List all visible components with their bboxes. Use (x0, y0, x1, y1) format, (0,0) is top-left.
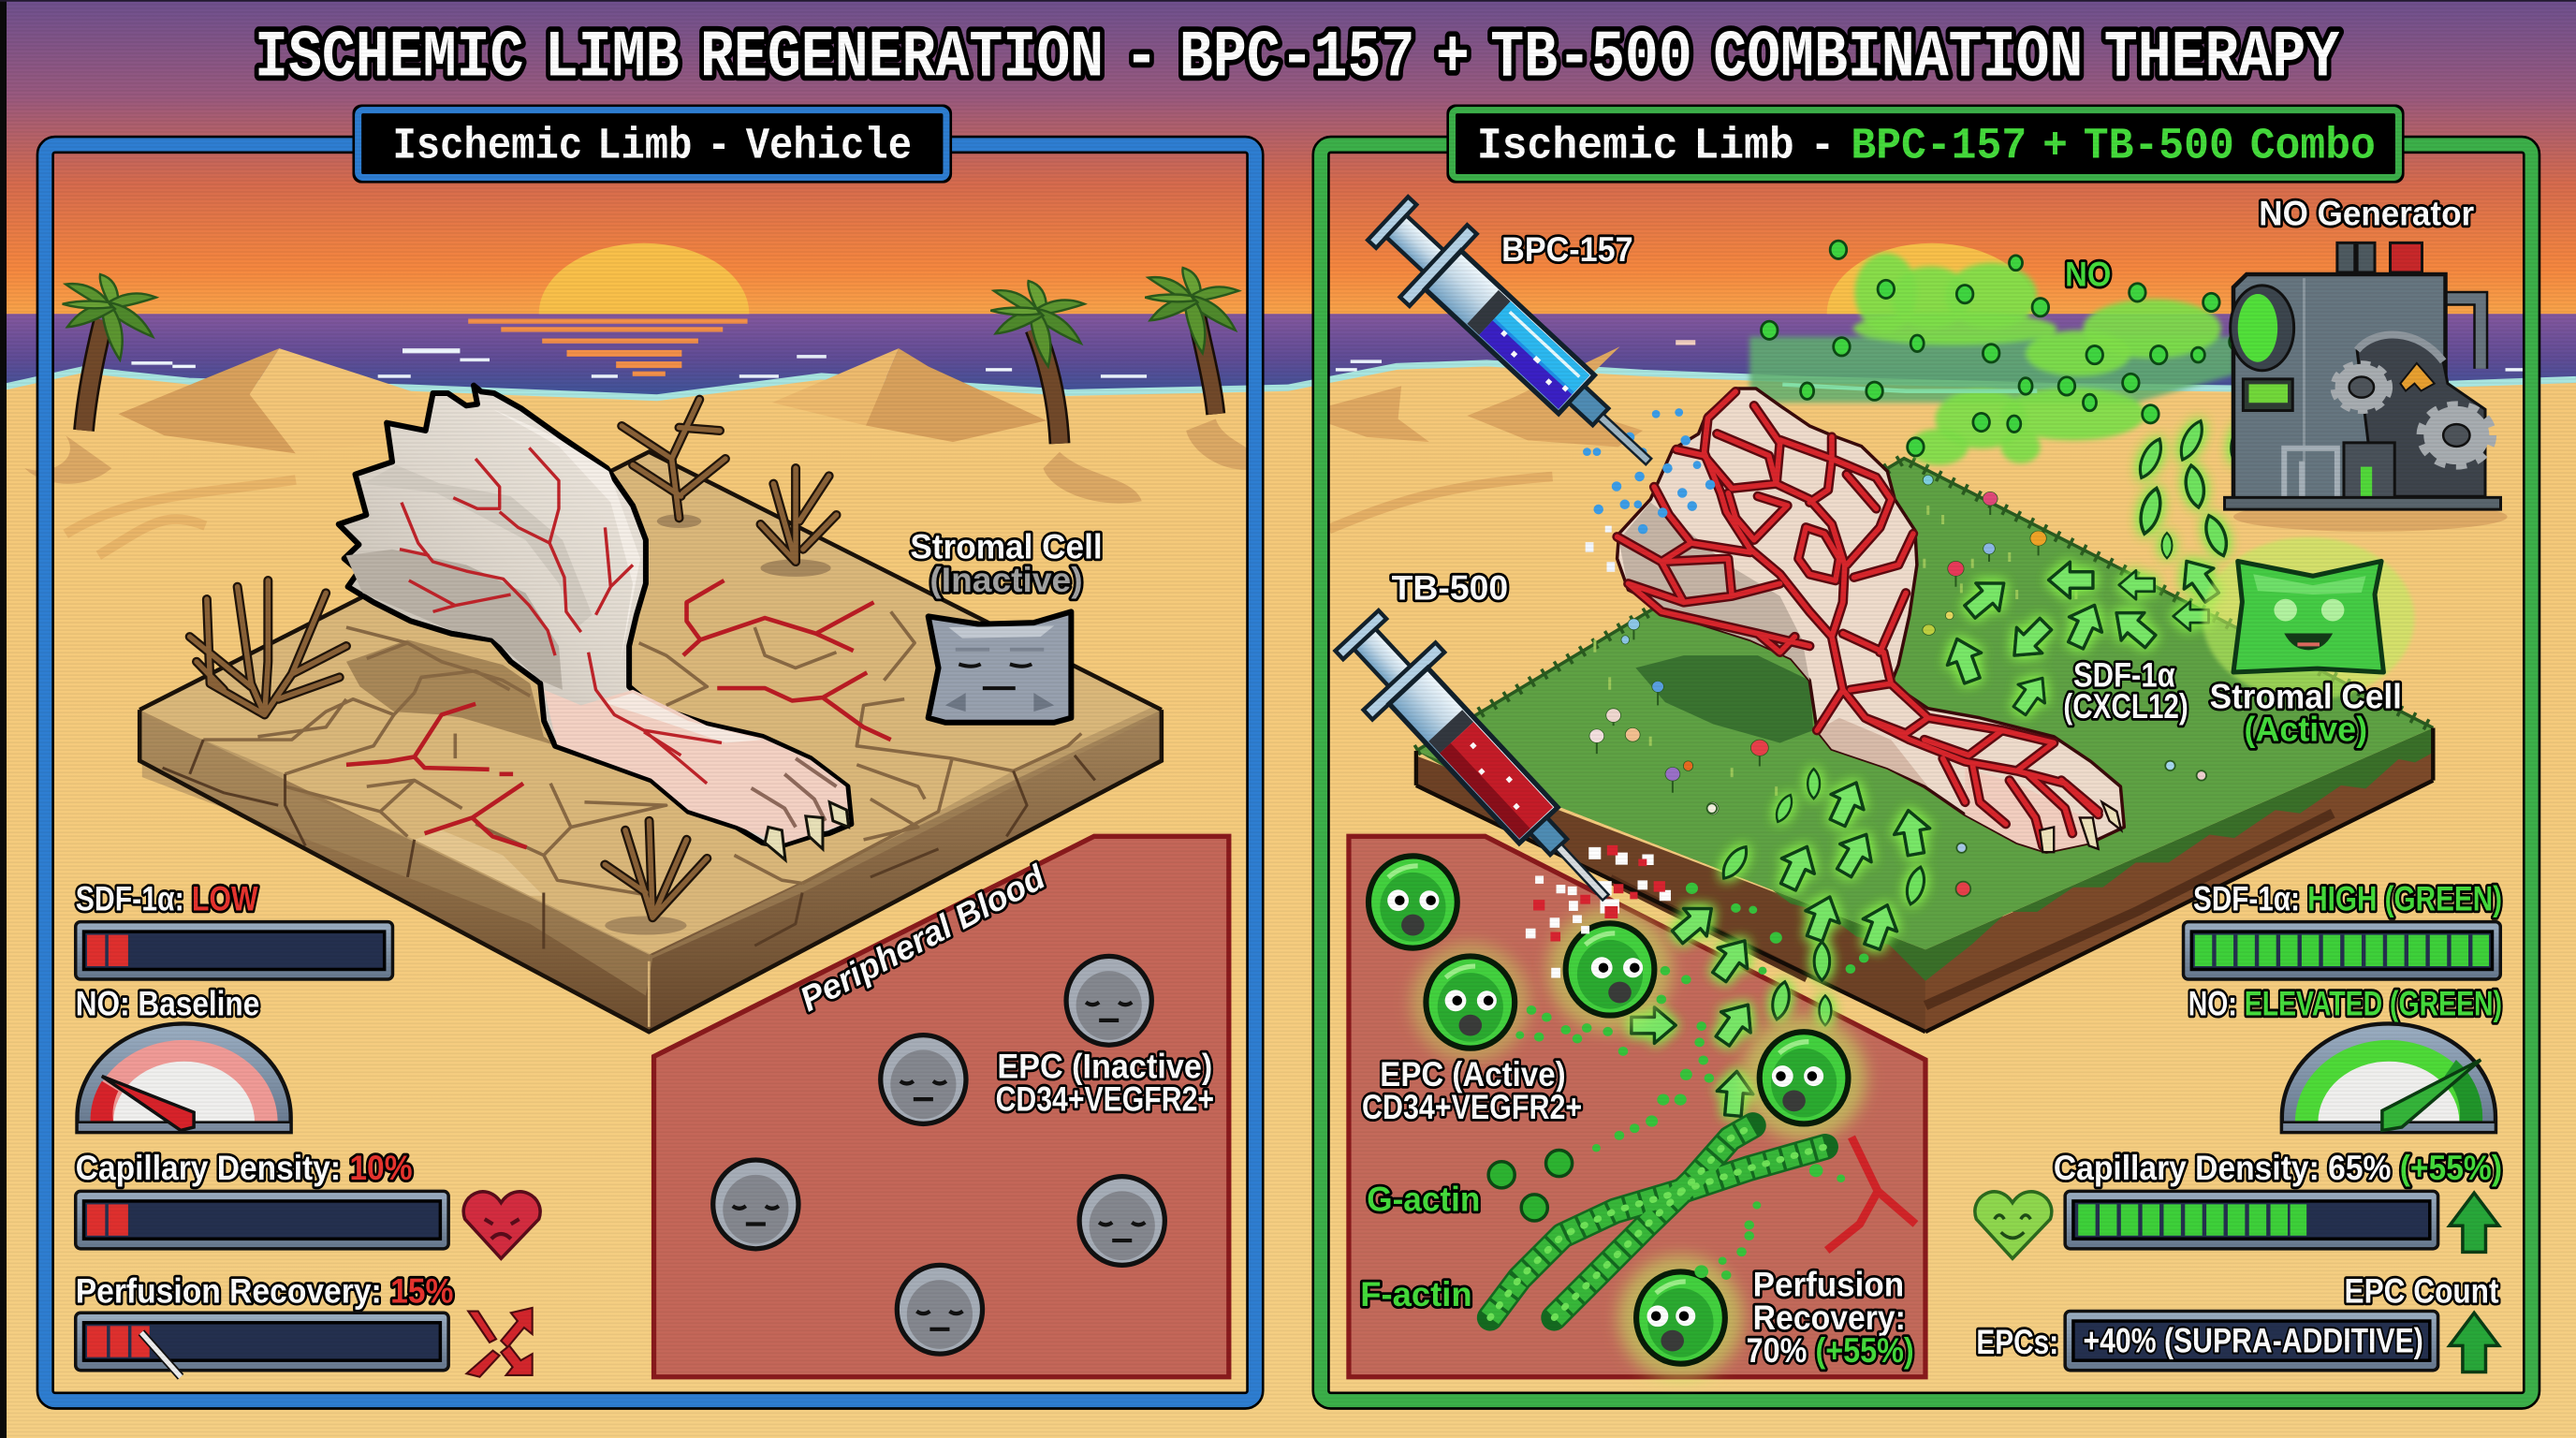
icon: happy heart (1975, 1192, 2052, 1258)
label: stromal cell active: Stromal Cell (2210, 677, 2402, 715)
label: NO generator: NO Generator (2259, 194, 2474, 232)
right dunes (1467, 346, 1643, 447)
meadow shading and tufts (zoom-space group) (1589, 475, 2076, 814)
label: NO: NO (2065, 255, 2111, 293)
palm tree 1 (63, 274, 156, 431)
label: BPC-157: BPC-157 (1501, 230, 1633, 269)
sun right (1827, 243, 2037, 314)
syringe: TB-500 (1321, 597, 1642, 931)
panel: vehicle (45, 144, 1255, 1401)
F-actin filaments (1490, 1125, 1825, 1318)
heading tab: combo: Ischemic Limb - BPC-157 + TB-500 Combo (1477, 122, 2376, 171)
red fissures (346, 580, 891, 847)
label: TB-500: TB-500 (1392, 569, 1508, 608)
gauge: NO elevated (2282, 1023, 2496, 1132)
gauge: NO baseline (77, 1023, 291, 1132)
peripheral blood compartment: vehicle (654, 836, 1229, 1377)
dead shrub small front (605, 821, 707, 935)
sun left (539, 243, 749, 314)
metric label: capillary density 65: Capillary Density: 65% (+55%) (2054, 1149, 2502, 1187)
label: EPC active: EPC (Active) (1380, 1055, 1566, 1093)
bar: EPC supra-additive (2065, 1312, 2438, 1371)
label: perfusion recovery 70 (1747, 1266, 1914, 1370)
label: stromal cell inactive: (Inactive) (929, 561, 1083, 599)
palm tree 2 (990, 281, 1084, 444)
label: EPC inactive: CD34+VEGFR2+ (996, 1079, 1214, 1118)
heading tab: vehicle (355, 107, 949, 181)
label: perfusion recovery 70: 70% (+55%) (1747, 1331, 1914, 1370)
panel frame: vehicle (45, 144, 1255, 1401)
sand ground (0, 365, 2576, 1438)
dead shrubs rear (622, 400, 837, 577)
peripheral blood compartment: combo (1349, 836, 1925, 1377)
inactive EPC cells (713, 956, 1164, 1354)
left dunes (118, 348, 296, 453)
flowers near paw (1707, 761, 2206, 896)
heading tab: vehicle: Ischemic Limb - Vehicle (392, 122, 912, 171)
heading tab: combo (1449, 107, 2402, 181)
shore foam (0, 363, 2576, 398)
panel frame: combo (1321, 144, 2532, 1401)
capillary network (1617, 391, 2099, 845)
label: stromal cell active: (Active) (2244, 711, 2367, 749)
icon: sad heart (463, 1192, 540, 1258)
stromal cell: active (2203, 537, 2414, 700)
metric label: SDF-1a low: SDF-1α: LOW (76, 879, 258, 917)
label: F-actin: F-actin (1360, 1275, 1472, 1313)
NO generator machine (2225, 242, 2508, 532)
stromal cell: inactive (929, 611, 1071, 723)
shaded earth plates (zoom-space group) (142, 580, 1160, 996)
sun reflection and waves (468, 318, 748, 376)
label: SDF-1a CXCL12: (CXCL12) (2063, 687, 2188, 726)
label: perfusion recovery 70: Perfusion (1753, 1266, 1904, 1304)
metric label: SDF-1a high: SDF-1α: HIGH (GREEN) (2193, 879, 2502, 917)
panel: combo therapy (1321, 144, 2532, 1401)
label: perfusion recovery 70: Recovery: (1753, 1299, 1906, 1337)
label: SDF-1a CXCL12 (2063, 656, 2188, 726)
icon: up arrow capillary (2450, 1193, 2499, 1252)
migrating cell trail (1515, 883, 1868, 1280)
syringe: BPC-157 (1354, 183, 1682, 498)
bar: perfusion recovery 15 (76, 1313, 448, 1377)
label: stromal cell inactive: Stromal Cell (910, 528, 1103, 566)
earth cracks (163, 611, 1095, 949)
TB syringe injection spray (1526, 845, 1671, 977)
bar: EPC supra-additive: +40% (SUPRA-ADDITIVE) (2083, 1321, 2423, 1359)
metric label: NO baseline: NO: Baseline (76, 985, 259, 1023)
bar: SDF-1a high (2184, 922, 2500, 979)
ischemic limb: pale (339, 386, 851, 845)
bar: capillary density 10 (76, 1191, 448, 1249)
label: peripheral blood: Peripheral Blood (794, 857, 1052, 1019)
metric label: perfusion recovery 15: Perfusion Recovery: 15% (76, 1272, 453, 1311)
icon: dispersing red arrows (466, 1308, 533, 1377)
limb claws (765, 802, 849, 859)
BPC syringe injection spray (1583, 408, 1715, 572)
icon: up arrow EPC (2450, 1313, 2499, 1372)
isometric platform: meadow (1416, 459, 2433, 1032)
isometric platform: cracked earth (139, 452, 1162, 1032)
flowers (1589, 475, 2046, 814)
palm tree 3 (1145, 268, 1238, 414)
label: stromal cell active (2210, 677, 2402, 749)
label: stromal cell inactive (910, 528, 1103, 599)
label: EPC inactive: EPC (Inactive) (997, 1047, 1212, 1085)
metric label: capillary density 10: Capillary Density: 10% (76, 1149, 413, 1187)
label: EPC active (1362, 1055, 1582, 1126)
bar: capillary density 65 (2065, 1191, 2438, 1249)
palm shadows (24, 419, 1262, 504)
NO gas cloud (1749, 241, 2243, 465)
G-actin monomers (1488, 1151, 1573, 1221)
dead shrub large (190, 580, 346, 714)
NO particles (1761, 241, 2243, 456)
vascularised limb (1617, 389, 2124, 852)
bar: SDF-1a low (76, 922, 392, 979)
faint veins (400, 448, 722, 784)
label: SDF-1a CXCL12: SDF-1α (2073, 656, 2175, 695)
label: EPC count: EPC Count (2345, 1272, 2499, 1311)
metric label: NO elevated: NO: ELEVATED (GREEN) (2188, 985, 2502, 1023)
limb claws combo (2040, 802, 2121, 852)
active EPC cells (1368, 856, 1866, 1380)
regrowing capillary (1827, 1137, 1915, 1251)
label: EPCs: EPCs: (1976, 1323, 2058, 1361)
label: EPC inactive (996, 1047, 1214, 1118)
label: EPC active: CD34+VEGFR2+ (1362, 1088, 1582, 1126)
SDF-1a chemokine arrows (1632, 418, 2255, 1117)
label: G-actin: G-actin (1367, 1180, 1480, 1218)
